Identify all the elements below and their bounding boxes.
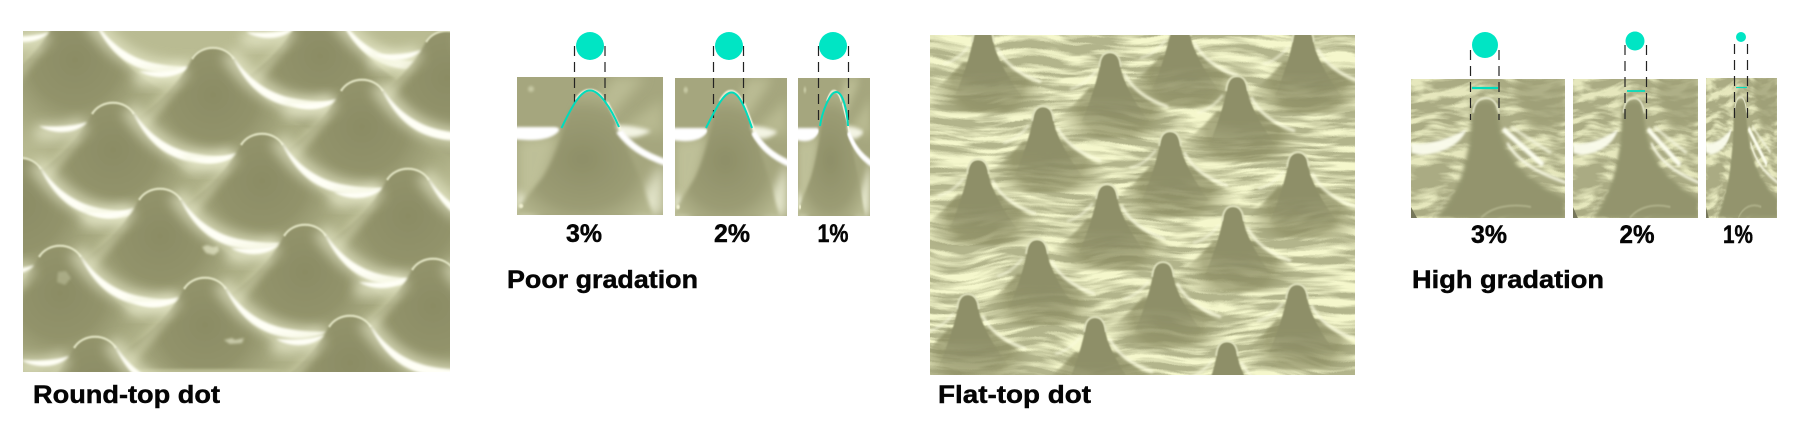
inset: flat-top 2% [1573, 79, 1698, 218]
label: 1%: 1% [818, 220, 848, 248]
label: 2%: 2% [1620, 221, 1654, 249]
label: 3%: 3% [566, 220, 602, 248]
label: 1%: 1% [1723, 221, 1753, 249]
label: 3%: 3% [1471, 221, 1507, 249]
dot: 2% round [715, 32, 743, 60]
panel: high gradation comparison [1381, 32, 1791, 294]
dot: 3% flat [1472, 32, 1498, 58]
heading: Poor gradation: Poor gradation [507, 266, 698, 294]
flat-top profile lines [1472, 88, 1747, 91]
inset: flat-top 1% [1706, 78, 1777, 218]
dot: 1% round [819, 32, 847, 60]
profile curves: round tops [562, 90, 848, 128]
heading: Flat-top dot: Flat-top dot [938, 381, 1092, 409]
label: 2%: 2% [714, 220, 750, 248]
dot: 2% flat [1626, 32, 1644, 50]
heading: Round-top dot: Round-top dot [33, 381, 221, 409]
panel: round-top dot micrograph [0, 9, 587, 428]
dot: 1% flat [1736, 32, 1746, 42]
dot: 3% round [576, 32, 604, 60]
panel: poor gradation comparison [507, 32, 872, 294]
inset: round-top 3% [517, 77, 663, 215]
panel: flat-top dot micrograph [890, 5, 1395, 427]
dashed guides: poor gradation [574, 46, 848, 122]
inset: round-top 2% [675, 78, 787, 216]
dashed guides: high gradation [1470, 44, 1748, 120]
heading: High gradation: High gradation [1412, 266, 1604, 294]
inset: round-top 1% [798, 78, 870, 216]
inset: flat-top 3% [1411, 79, 1565, 218]
